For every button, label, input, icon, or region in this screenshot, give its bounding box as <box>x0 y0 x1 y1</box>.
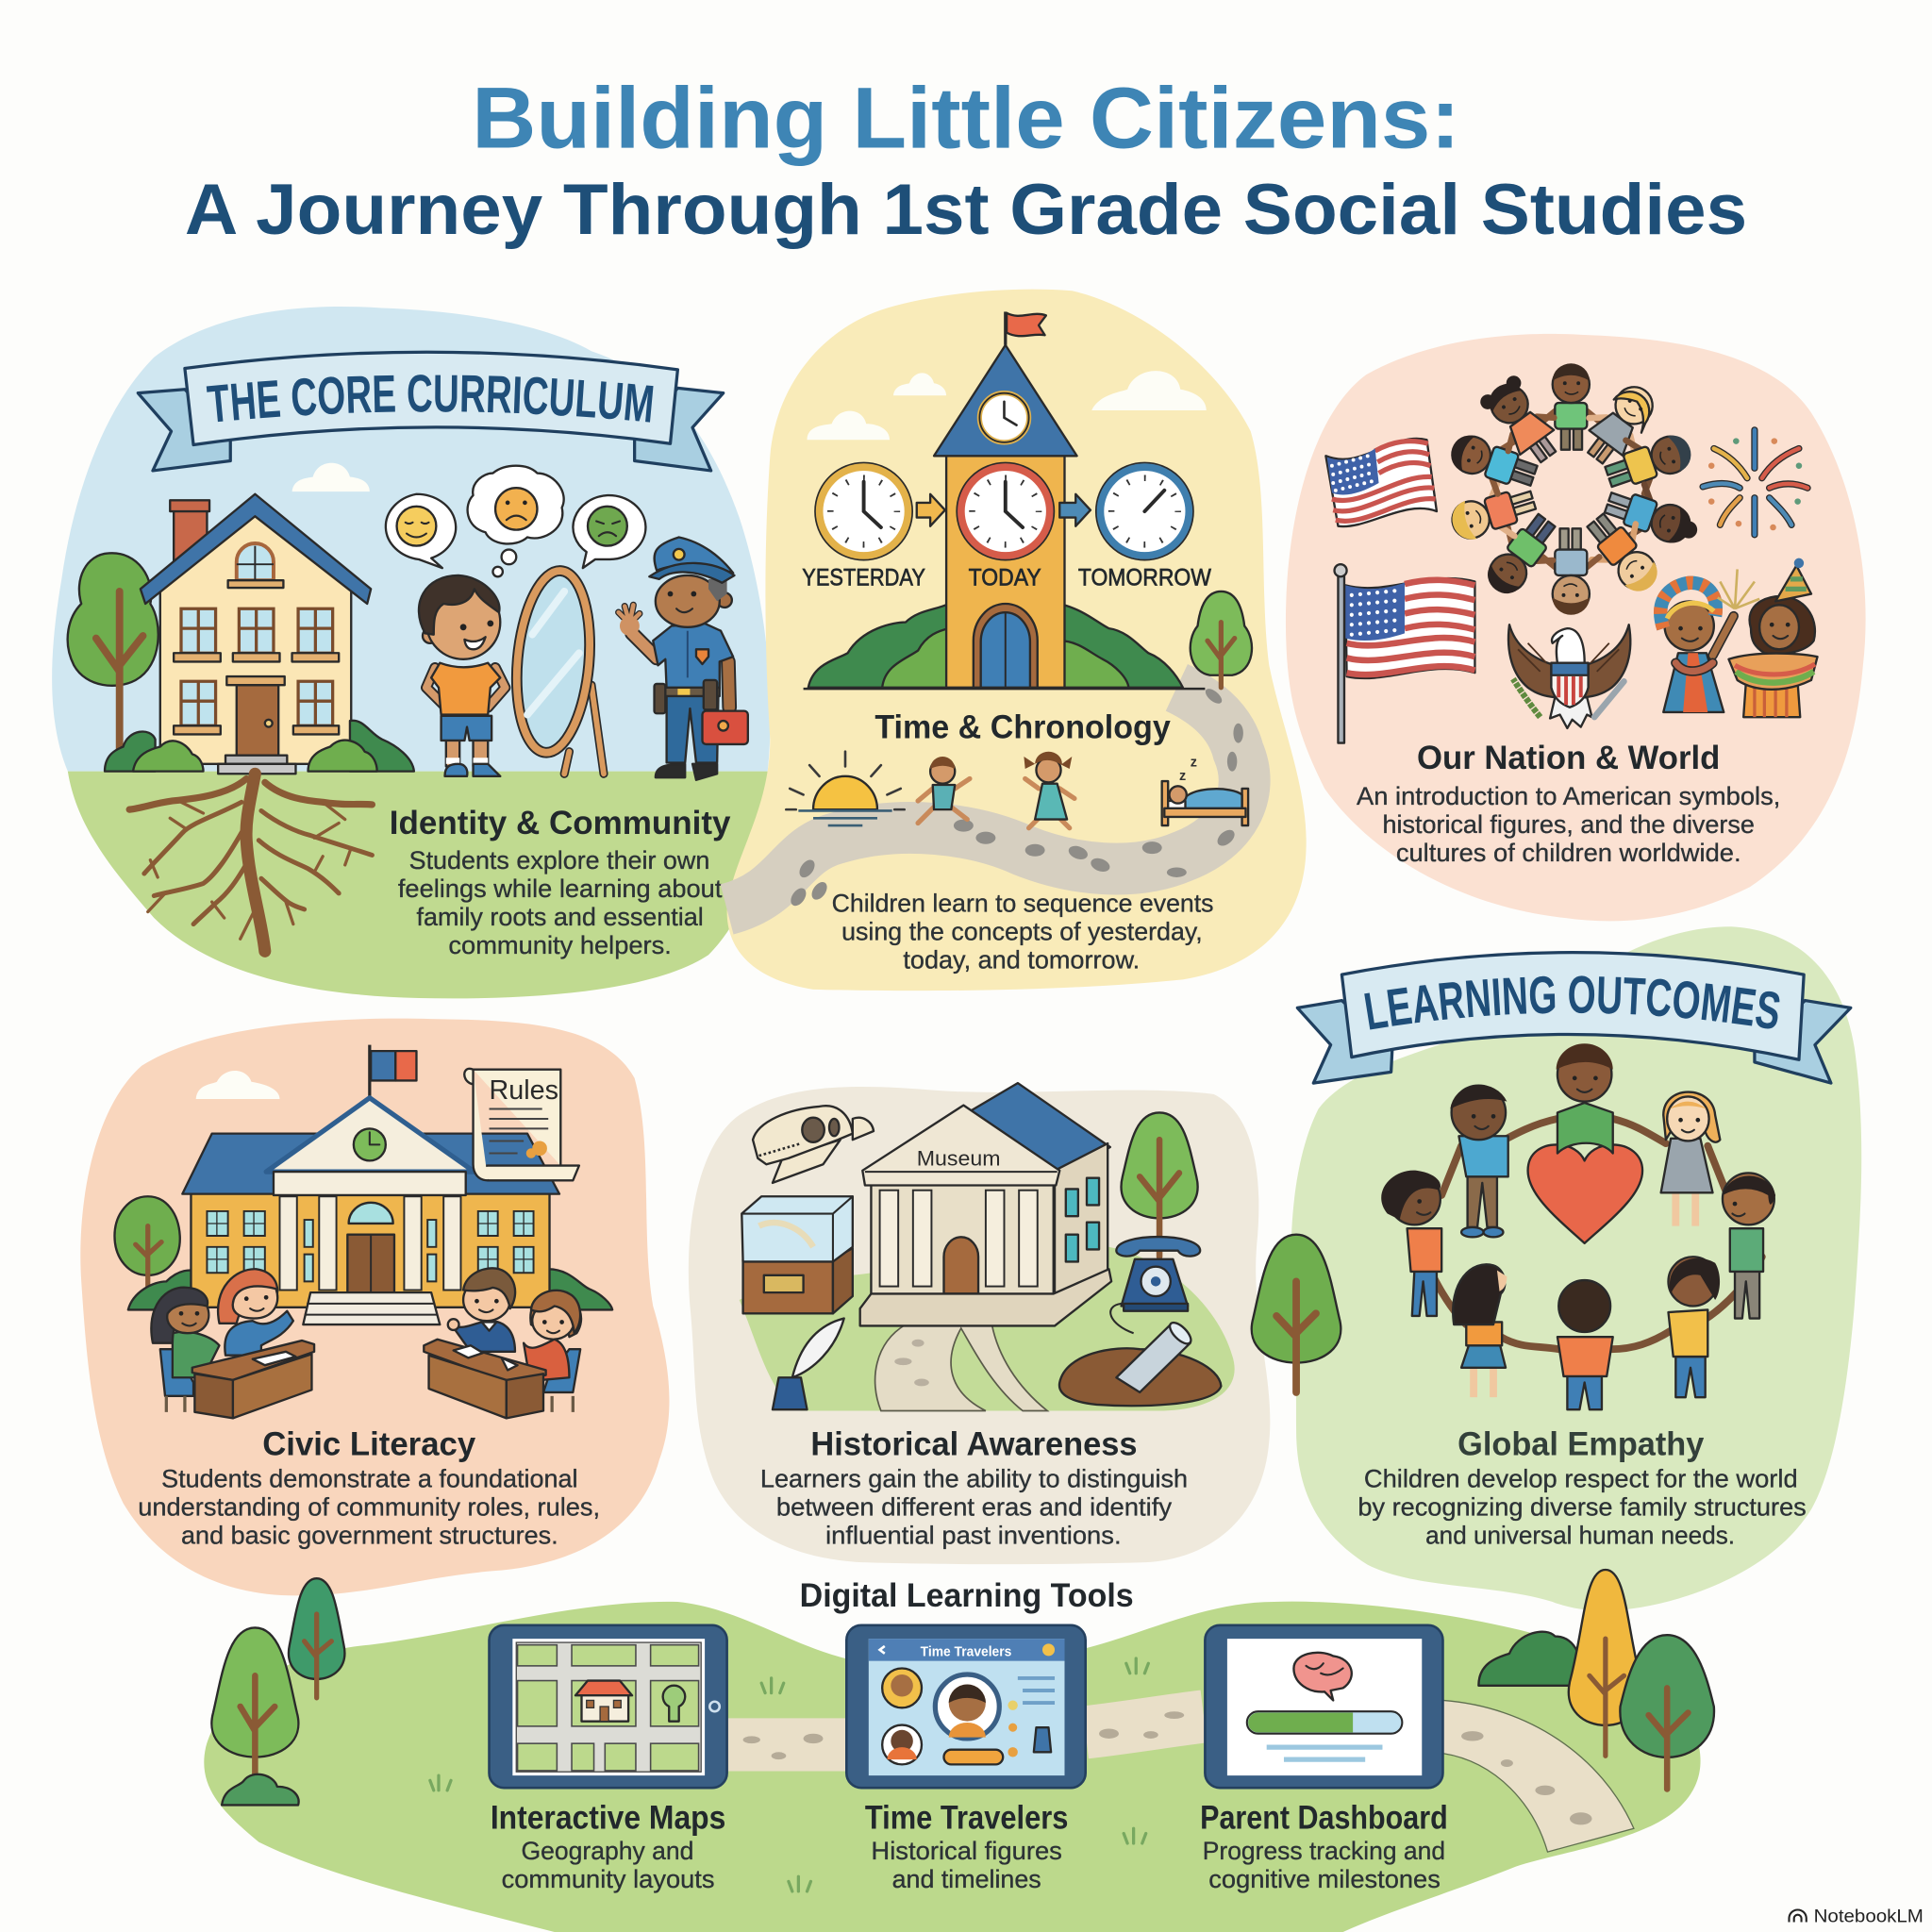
icon: house <box>141 494 371 774</box>
icon: connecting road <box>727 1700 1634 1852</box>
icon: cloud <box>292 463 370 491</box>
text: nation description: An introduction to American symbols, <box>1357 782 1780 810</box>
text: time description: using the concepts of yesterday, <box>841 918 1203 946</box>
text: time description: today, and tomorrow. <box>903 946 1140 974</box>
banner: the core curriculum: THE CORE CURRICULUM <box>206 375 653 423</box>
icon: rotary telephone <box>1110 1237 1200 1333</box>
icon: large american flag <box>1335 564 1474 743</box>
icon: bald eagle <box>1508 625 1630 728</box>
label: today: TODAY <box>969 565 1041 591</box>
text: interactive maps description <box>502 1837 715 1893</box>
icon: sleeping child in bed: z <box>1191 755 1197 770</box>
text: historical description: between different eras and identify <box>776 1493 1173 1522</box>
title <box>185 71 1747 250</box>
heading: time and chronology: Time & Chronology <box>874 708 1171 745</box>
panel: historical awareness <box>689 1083 1270 1564</box>
text: historical description <box>760 1464 1188 1550</box>
text: interactive maps description: Geography and <box>521 1837 693 1865</box>
panel: identity and community <box>52 307 771 998</box>
icon: circle of children <box>1443 363 1706 615</box>
text: civic description: understanding of community roles, rules, <box>138 1493 600 1522</box>
icon: sunrise <box>786 752 905 825</box>
text: historical description: Learners gain the ability to distinguish <box>760 1464 1188 1492</box>
label: yesterday: YESTERDAY <box>802 565 925 591</box>
icon: trees left <box>211 1578 344 1805</box>
icon: clouds <box>808 371 1207 440</box>
icon: sleeping child in bed <box>1162 755 1248 825</box>
icon: rules scroll: Rules <box>490 1075 558 1106</box>
icon: time capsule in dirt <box>1059 1319 1221 1406</box>
heading: parent dashboard: Parent Dashboard <box>1200 1799 1448 1836</box>
icon: clock tower <box>934 311 1077 688</box>
icon: grass tufts <box>430 1658 1148 1891</box>
icon: green lawn and path <box>740 1244 1235 1411</box>
heading: historical awareness: Historical Awareness <box>810 1426 1138 1463</box>
text: empathy description <box>1357 1464 1807 1550</box>
text: civic description <box>138 1464 600 1550</box>
text: time description: Children learn to sequence events <box>832 890 1214 918</box>
panel: civic literacy <box>80 1019 670 1595</box>
text: parent dashboard description <box>1203 1837 1445 1893</box>
icon: time travelers tablet <box>846 1625 1086 1788</box>
icon: tree <box>1191 591 1252 688</box>
icon: time travelers tablet: Time Travelers <box>921 1644 1011 1659</box>
text: empathy description: Children develop respect for the world <box>1364 1464 1798 1492</box>
text: time travelers description: Historical figures <box>871 1837 1062 1865</box>
icon: hills and ground <box>808 604 1183 688</box>
text: historical description: influential past inventions. <box>825 1522 1122 1550</box>
text: time description <box>832 890 1214 974</box>
banner: the core curriculum <box>136 351 724 473</box>
icon: fireworks <box>1703 430 1807 535</box>
heading: civic literacy: Civic Literacy <box>262 1426 476 1463</box>
icon: tree <box>1122 1112 1198 1257</box>
icon: right desk with students <box>424 1268 581 1418</box>
footer: notebooklm mark: NotebookLM <box>1814 1907 1924 1927</box>
icon: rules scroll <box>464 1069 579 1180</box>
icon: running girl <box>1024 752 1074 828</box>
heading: time travelers: Time Travelers <box>865 1799 1068 1836</box>
icon: tree by house <box>68 553 158 764</box>
icon: mirror <box>509 568 604 774</box>
heading: interactive maps: Interactive Maps <box>491 1799 725 1836</box>
text: nation description: historical figures, and the diverse <box>1382 810 1755 839</box>
icon: trees right <box>1478 1570 1714 1789</box>
panel: digital learning tools <box>204 1570 1714 1932</box>
text: nation description <box>1357 782 1780 867</box>
text: time travelers description <box>871 1837 1062 1893</box>
label: tomorrow: TOMORROW <box>1078 565 1211 591</box>
icon: heart <box>1528 1144 1642 1243</box>
icon: running boy <box>918 757 970 823</box>
icon: small american flag <box>1325 439 1437 526</box>
icon: quill and ink <box>773 1319 844 1409</box>
title: Building Little Citizens: <box>472 71 1460 167</box>
text: identity description: feelings while learning about <box>398 874 723 903</box>
title: A Journey Through 1st Grade Social Studies <box>185 170 1747 250</box>
icon: smiling boy <box>419 575 506 776</box>
icon: sleeping child in bed: z <box>1179 769 1186 784</box>
panel: global empathy <box>1291 926 1861 1610</box>
text: nation description: cultures of children worldwide. <box>1396 839 1741 867</box>
icon: police officer <box>619 537 748 780</box>
icon: roots <box>129 774 372 951</box>
arrow: yesterday to today <box>917 494 945 526</box>
text: identity description: family roots and essential <box>416 903 704 931</box>
banner: learning outcomes: LEARNING OUTCOMES <box>1364 975 1779 1030</box>
text: empathy description: and universal human needs. <box>1425 1522 1735 1550</box>
icon: yesterday clock <box>815 462 912 560</box>
icon: bushes <box>105 721 414 772</box>
icon: tree and bushes <box>114 1196 612 1309</box>
panel: time and chronology <box>727 290 1307 991</box>
icon: fossil glass case <box>741 1196 853 1313</box>
icon: interactive maps tablet <box>490 1625 727 1788</box>
banner: learning outcomes <box>1296 951 1853 1085</box>
text: identity description <box>398 846 723 959</box>
text: empathy description: by recognizing diverse family structures <box>1357 1493 1807 1522</box>
icon: school building <box>182 1045 559 1324</box>
icon: museum building <box>860 1083 1111 1325</box>
heading: digital learning tools: Digital Learning Tools <box>800 1577 1134 1614</box>
text: time travelers description: and timelines <box>892 1865 1041 1893</box>
panel: our nation and world <box>1286 334 1866 921</box>
icon: tomorrow clock <box>1096 462 1193 560</box>
heading: identity and community: Identity & Community <box>390 805 731 841</box>
text: civic description: and basic government structures. <box>181 1522 558 1550</box>
text: civic description: Students demonstrate a foundational <box>161 1464 578 1492</box>
text: identity description: community helpers. <box>448 931 672 959</box>
arrow: today to tomorrow <box>1059 494 1091 526</box>
heading: our nation and world: Our Nation & World <box>1417 740 1720 776</box>
icon: left desk with students <box>151 1269 314 1418</box>
icon: museum building: Museum <box>917 1147 1001 1171</box>
icon: standalone tree <box>1252 1235 1341 1392</box>
text: interactive maps description: community layouts <box>502 1865 715 1893</box>
icon: cloud <box>196 1071 279 1099</box>
heading: global empathy: Global Empathy <box>1457 1426 1705 1463</box>
icon: parent dashboard tablet <box>1205 1625 1442 1788</box>
text: parent dashboard description: cognitive milestones <box>1208 1865 1441 1893</box>
icon: dinosaur skull <box>753 1106 874 1183</box>
icon: ring of children holding hands <box>1381 1043 1775 1409</box>
text: identity description: Students explore their own <box>409 846 709 874</box>
icon: feeling bubbles <box>386 466 645 576</box>
icon: children in traditional dress <box>1660 558 1818 717</box>
icon: winding footprint path <box>727 686 1244 909</box>
text: parent dashboard description: Progress tracking and <box>1203 1837 1445 1865</box>
